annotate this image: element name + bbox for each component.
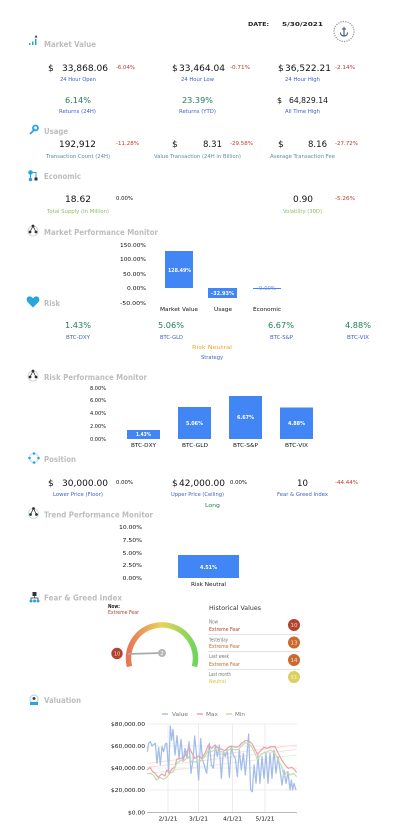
metric: volatility: 0.90 <box>293 195 313 205</box>
row: last month <box>208 670 300 685</box>
metric: volatility <box>283 195 355 215</box>
y axis labels: -50.00% <box>120 301 146 307</box>
metric: 24 hour high: -2.14% <box>335 65 355 71</box>
heading: valuation: Valuation <box>44 696 81 705</box>
heading: risk: Risk <box>44 299 61 308</box>
row: now: Extreme Fear <box>209 627 241 633</box>
y axis labels: 0.00% <box>90 437 106 443</box>
metric: total supply <box>46 195 133 215</box>
metric: all time high <box>277 96 328 115</box>
icon: heart <box>27 296 39 308</box>
metric: fear and greed index: -44.44% <box>335 480 358 486</box>
y axis labels: $80,000.00 <box>111 722 146 728</box>
icon: anchor logo <box>334 22 354 42</box>
heading: market performance monitor: Market Performance Monitor <box>44 228 158 237</box>
label: long: Long <box>205 503 220 509</box>
bar: risk neutral: Risk Neutral <box>191 582 226 588</box>
metric: 24 hour low: 33,464.04 <box>179 64 225 74</box>
line chart: valuation <box>111 712 297 822</box>
metric: upper price <box>171 479 247 498</box>
panel: usage <box>30 126 358 160</box>
metric: value transaction <box>154 140 253 160</box>
row: last month: 51 <box>290 675 298 681</box>
now status: Extreme Fear <box>108 610 140 616</box>
bar: btc-vix: 4.88% <box>288 421 305 427</box>
metric: btc-vix: 4.88% <box>345 321 371 330</box>
heading: risk performance monitor: Risk Performance Monitor <box>44 373 147 382</box>
metric: 24 hour high: $ <box>278 64 284 74</box>
y axis labels: 100.00% <box>120 257 146 263</box>
bar: economic <box>253 286 281 313</box>
bar chart: trend performance <box>119 525 239 588</box>
y axis labels: 5.00% <box>122 551 142 557</box>
icon: org chart <box>30 592 40 602</box>
row: last week: Extreme Fear <box>209 662 241 668</box>
y axis labels: 2.50% <box>122 563 142 569</box>
metric: returns 24h: 6.14% <box>65 96 91 105</box>
icon: wrench <box>30 126 38 134</box>
metric: lower price: $ <box>48 479 54 489</box>
y axis labels: 0.00% <box>122 576 142 582</box>
bar: btc-gld <box>178 407 211 449</box>
date header: 5/30/2021 <box>282 22 323 28</box>
metric: fear and greed index <box>277 479 358 498</box>
metric: btc-dxy <box>65 321 91 341</box>
metric: all time high: All Time High <box>285 109 320 115</box>
metric: fear and greed index: Fear & Greed Index <box>277 492 328 498</box>
panel: risk performance monitor <box>28 370 313 449</box>
bar: btc-s&p: 6.67% <box>237 415 254 421</box>
metric: returns 24h <box>59 96 96 115</box>
metric: upper price: Upper Price (Ceiling) <box>171 492 224 498</box>
metric: 24 hour open: 33,868.06 <box>62 64 108 74</box>
metric: btc-vix <box>345 321 371 341</box>
gauge needle: 2 <box>160 651 164 657</box>
metric: transaction count: Transaction Count (24H) <box>45 154 110 160</box>
panel: economic <box>29 171 355 215</box>
row: yesterday: Extreme Fear <box>209 644 241 650</box>
metric: total supply: Total Supply (In Million) <box>46 209 109 215</box>
metric: lower price: Lower Price (Floor) <box>53 492 103 498</box>
bar: btc-s&p <box>229 396 262 449</box>
bar: risk neutral <box>178 555 239 588</box>
bar: btc-vix: BTC-VIX <box>285 443 308 449</box>
row: now: 10 <box>290 623 298 629</box>
metric: value transaction: 8.31 <box>203 140 222 150</box>
panel: market performance monitor <box>28 225 281 313</box>
metric: volatility: Volatility (30D) <box>283 209 322 215</box>
metric: 24 hour open <box>48 64 135 83</box>
bar: btc-vix <box>280 408 313 449</box>
metric: btc-gld: 5.06% <box>158 321 184 330</box>
date header <box>248 22 323 28</box>
strategy <box>192 345 233 361</box>
metric: transaction count <box>45 140 139 160</box>
row: last week <box>208 652 300 668</box>
y axis labels <box>120 243 146 307</box>
x axis labels: 4/1/21 <box>223 816 242 822</box>
metric: 24 hour high: 36,522.21 <box>285 64 331 74</box>
bar: btc-dxy: 1.43% <box>136 432 151 438</box>
bar: usage: -32.93% <box>211 291 234 297</box>
bar chart: risk performance <box>90 386 313 449</box>
panel: market value <box>29 35 355 115</box>
y axis labels: 7.50% <box>122 538 142 544</box>
row: last month: Neutral <box>209 679 226 685</box>
y axis labels: 2.00% <box>90 424 106 430</box>
y axis labels: 4.00% <box>90 411 106 417</box>
metric: upper price: 42,000.00 <box>179 479 225 489</box>
metric: total supply: 18.62 <box>65 195 91 205</box>
icon: flow <box>29 171 38 181</box>
series lines <box>147 726 297 792</box>
metric: btc-s&p: BTC-S&P <box>270 335 293 341</box>
bar: market value: Market Value <box>160 307 199 313</box>
bar: economic: 0.00% <box>259 286 276 292</box>
heading: market value: Market Value <box>44 40 96 49</box>
y axis labels: $40,000.00 <box>111 766 146 772</box>
metric: all time high: $ <box>277 96 282 105</box>
y axis labels <box>111 722 146 816</box>
y axis labels: 150.00% <box>120 243 146 249</box>
gauge value: 10 <box>114 652 120 658</box>
bar: btc-gld: BTC-GLD <box>182 443 208 449</box>
y axis labels: $0.00 <box>128 810 146 816</box>
x axis labels: 2/1/21 <box>158 816 178 822</box>
panel: valuation <box>30 695 297 822</box>
y axis labels <box>119 525 142 582</box>
metric: btc-vix: BTC-VIX <box>347 335 370 341</box>
heading: fear and greed index: Fear & Greed Index <box>44 594 123 602</box>
bar: market value: 128.49% <box>168 268 191 274</box>
y axis labels: $60,000.00 <box>111 744 146 750</box>
metric: 24 hour low <box>172 64 250 83</box>
metric: average transaction fee: -27.72% <box>335 141 358 147</box>
strategy: Strategy <box>201 355 223 361</box>
row: yesterday: Yesterday <box>208 638 228 644</box>
metric: 24 hour low: $ <box>172 64 178 74</box>
panel: position <box>28 452 358 509</box>
icon: network <box>28 370 38 381</box>
metric: 24 hour open: $ <box>48 64 54 74</box>
heading: usage: Usage <box>44 127 68 136</box>
heading: historical values: Historical Values <box>209 604 262 612</box>
y axis labels: 0.00% <box>127 286 146 292</box>
metric: returns 24h: Returns (24H) <box>59 109 96 115</box>
strategy: Risk Neutral <box>192 345 233 351</box>
metric: fear and greed index: 10 <box>297 479 308 489</box>
row: yesterday <box>208 634 300 650</box>
metric: total supply: 0.00% <box>116 196 133 202</box>
y axis labels: 6.00% <box>90 398 106 404</box>
metric: 24 hour open: -6.04% <box>116 65 135 71</box>
icon: network <box>28 225 38 236</box>
bar: btc-gld: 5.06% <box>186 421 203 427</box>
row: now: Now <box>209 620 218 626</box>
bar: market value <box>160 251 199 313</box>
metric: average transaction fee: Average Transaction Fee <box>270 154 335 160</box>
metric: 24 hour high <box>278 64 355 83</box>
row: now <box>209 619 300 633</box>
metric: 24 hour high: 24 Hour High <box>285 77 320 83</box>
bar: economic: Economic <box>253 307 281 313</box>
y axis labels <box>90 386 106 443</box>
legend: Max <box>206 712 218 718</box>
bar: btc-dxy: BTC-DXY <box>131 443 157 449</box>
metric: returns ytd: Returns (YTD) <box>179 109 216 115</box>
y axis labels: 10.00% <box>119 525 142 531</box>
metric: lower price: 0.00% <box>116 480 133 486</box>
bar: btc-dxy <box>127 430 160 449</box>
metric: btc-gld <box>158 321 184 341</box>
y axis labels: 8.00% <box>90 386 106 392</box>
date header: DATE: <box>248 22 269 28</box>
metric: lower price <box>48 479 133 498</box>
x axis labels <box>158 816 274 822</box>
row: yesterday: 13 <box>290 640 298 646</box>
y axis labels: 50.00% <box>123 272 146 278</box>
metric: lower price: 30,000.00 <box>62 479 108 489</box>
heading: economic: Economic <box>44 172 81 181</box>
icon: valuation <box>30 695 38 705</box>
bar: usage: Usage <box>214 307 233 313</box>
metric: upper price: $ <box>172 479 178 489</box>
metric: average transaction fee: 8.16 <box>308 140 327 150</box>
bar: btc-s&p: BTC-S&P <box>233 443 259 449</box>
metric: average transaction fee <box>270 140 358 160</box>
metric: value transaction: $ <box>172 140 178 150</box>
metric: volatility: -5.26% <box>335 196 355 202</box>
gauge arc <box>129 625 196 666</box>
bar: risk neutral: 4.51% <box>200 565 217 571</box>
bar chart: market performance <box>120 243 281 313</box>
legend: Value <box>172 712 188 718</box>
icon: bar signal <box>29 35 38 45</box>
metric: value transaction: Value Transaction (24H in Billion) <box>154 154 241 160</box>
x axis labels: 5/1/21 <box>256 816 274 822</box>
metric: 24 hour low: 24 Hour Low <box>181 77 214 83</box>
metric: all time high: 64,829.14 <box>289 96 328 105</box>
bar: usage <box>208 288 237 313</box>
metric: btc-s&p <box>268 321 294 341</box>
metric: btc-dxy: BTC-DXY <box>66 335 91 341</box>
panel: fear and greed index <box>30 592 300 685</box>
metric: 24 hour low: -0.71% <box>230 65 250 71</box>
now status: Now: <box>108 604 120 610</box>
x axis labels: 3/1/21 <box>189 816 208 822</box>
row: last week: Last week <box>209 654 229 660</box>
historical values <box>208 604 300 685</box>
metric: transaction count: -11.28% <box>116 141 139 147</box>
legend: Min <box>235 712 245 718</box>
now status <box>108 604 140 616</box>
heading: position: Position <box>44 455 76 464</box>
metric: returns ytd <box>179 96 216 115</box>
legend <box>162 712 245 718</box>
icon: network <box>28 508 38 518</box>
metric: upper price: 0.00% <box>230 480 247 486</box>
metric: btc-gld: BTC-GLD <box>160 335 183 341</box>
panel: risk <box>27 296 371 361</box>
metric: btc-s&p: 6.67% <box>268 321 294 330</box>
panel: trend performance monitor <box>28 508 239 588</box>
metric: value transaction: -29.58% <box>230 141 253 147</box>
icon: crosshair dots <box>28 452 40 464</box>
metric: transaction count: 192,912 <box>59 140 96 150</box>
metric: 24 hour open: 24 Hour Open <box>60 77 96 83</box>
metric: btc-dxy: 1.43% <box>65 321 91 330</box>
heading: trend performance monitor: Trend Performance Monitor <box>44 510 153 520</box>
y axis labels: $20,000.00 <box>111 788 146 794</box>
metric: returns ytd: 23.39% <box>182 96 213 105</box>
metric: average transaction fee: $ <box>278 140 284 150</box>
row: last week: 14 <box>290 658 298 664</box>
gauge <box>111 625 196 666</box>
row: last month: Last month <box>209 672 231 678</box>
